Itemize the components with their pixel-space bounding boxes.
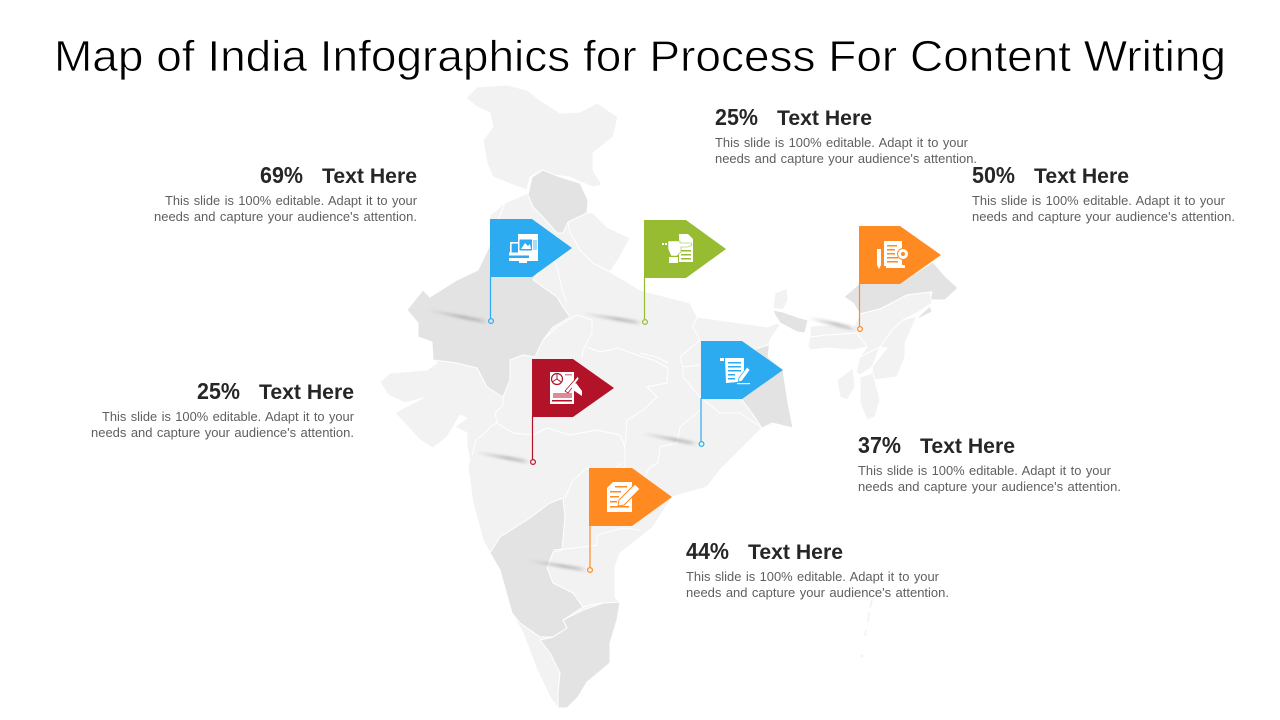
pennant xyxy=(701,341,783,399)
Nagaland link xyxy=(856,347,880,375)
icon: scroll and pencil xyxy=(720,358,750,384)
Manipur xyxy=(872,316,917,380)
text block: 25% left: 25% xyxy=(197,378,240,404)
Jammu and Kashmir xyxy=(466,85,618,190)
mainland base xyxy=(380,193,793,708)
flag: green writing hand xyxy=(643,220,726,324)
text block: 25% top xyxy=(715,104,977,166)
text block: 69% xyxy=(154,162,417,224)
pennant xyxy=(589,468,672,526)
text block: 25% top: needs and capture your audience's attention. xyxy=(715,152,977,166)
text block: 69%: needs and capture your audience's attention. xyxy=(154,210,417,224)
text block: 69%: This slide is 100% editable. Adapt it to your xyxy=(165,194,417,208)
pole and pin xyxy=(643,277,647,324)
text block: 44%: 44% xyxy=(686,538,729,564)
text block: 37%: 37% xyxy=(858,432,901,458)
Himachal Pradesh xyxy=(528,170,588,233)
text block: 25% left xyxy=(91,378,354,440)
text block: 25% left: This slide is 100% editable. Adapt it to your xyxy=(102,410,354,424)
Karnataka xyxy=(490,498,583,637)
icon: document with gear xyxy=(877,241,908,269)
pole and pin xyxy=(699,398,704,446)
text block: 50%: 50% xyxy=(972,162,1015,188)
text block: 44%: needs and capture your audience's attention. xyxy=(686,586,949,600)
pennant xyxy=(490,219,572,277)
pole and pin xyxy=(531,416,535,464)
flag: orange north-east xyxy=(858,226,941,331)
pennant xyxy=(859,226,941,284)
icon: web layout xyxy=(509,234,538,263)
text block: 44%: Text Here xyxy=(748,540,843,564)
Arunachal Pradesh xyxy=(844,262,958,314)
text block: 69%: 69% xyxy=(260,162,303,188)
flag: orange south xyxy=(588,468,672,572)
icon: report with pen xyxy=(550,372,582,404)
pennant xyxy=(532,359,614,417)
pole and pin xyxy=(588,525,592,572)
shadow north-east xyxy=(808,316,856,331)
text block: 25% top: This slide is 100% editable. Adapt it to your xyxy=(715,136,968,150)
map of India xyxy=(380,85,958,708)
Rajasthan xyxy=(407,245,570,397)
pole and pin xyxy=(858,283,862,331)
text block: 44% xyxy=(686,538,949,600)
title: Map of India Infographics for Process For Content Writing xyxy=(54,32,1226,81)
flag: blue web design xyxy=(489,219,572,323)
Bengal corridor xyxy=(773,310,808,333)
Mizoram xyxy=(860,373,880,420)
text block: 25% left: needs and capture your audience's attention. xyxy=(91,426,354,440)
text block: 25% left: Text Here xyxy=(259,380,354,404)
text block: 69%: Text Here xyxy=(322,164,417,188)
shadow north xyxy=(582,312,642,325)
icon: form with pencil xyxy=(607,482,640,512)
state borders xyxy=(472,203,762,697)
Nicobar island xyxy=(860,654,864,658)
Nagaland sliver xyxy=(917,306,932,318)
Sikkim xyxy=(773,288,788,310)
text block: 25% top: Text Here xyxy=(777,106,872,130)
text block: 50% xyxy=(972,162,1235,224)
West Bengal xyxy=(730,325,793,428)
text block: 44%: This slide is 100% editable. Adapt it to your xyxy=(686,570,939,584)
text block: 37%: needs and capture your audience's attention. xyxy=(858,480,1121,494)
Assam xyxy=(810,292,932,357)
shadow south xyxy=(527,559,587,572)
pennant xyxy=(644,220,726,278)
icon: hand with document xyxy=(662,234,693,263)
flag: red central xyxy=(531,359,614,464)
Tripura xyxy=(837,368,855,400)
text block: 37% xyxy=(858,432,1121,494)
text block: 50%: Text Here xyxy=(1034,164,1129,188)
shadow west xyxy=(428,309,488,324)
Meghalaya xyxy=(808,333,867,350)
Andaman islands xyxy=(865,600,872,636)
flag: blue east xyxy=(699,341,783,446)
text block: 37%: This slide is 100% editable. Adapt it to your xyxy=(858,464,1111,478)
Tamil Nadu xyxy=(540,602,620,708)
text block: 37%: Text Here xyxy=(920,434,1015,458)
text block: 50%: This slide is 100% editable. Adapt it to your xyxy=(972,194,1225,208)
text block: 25% top: 25% xyxy=(715,104,758,130)
shadow central xyxy=(475,451,530,464)
shadow east xyxy=(641,432,698,446)
text block: 50%: needs and capture your audience's attention. xyxy=(972,210,1235,224)
pole and pin xyxy=(489,276,493,323)
pin shadows xyxy=(428,309,856,572)
